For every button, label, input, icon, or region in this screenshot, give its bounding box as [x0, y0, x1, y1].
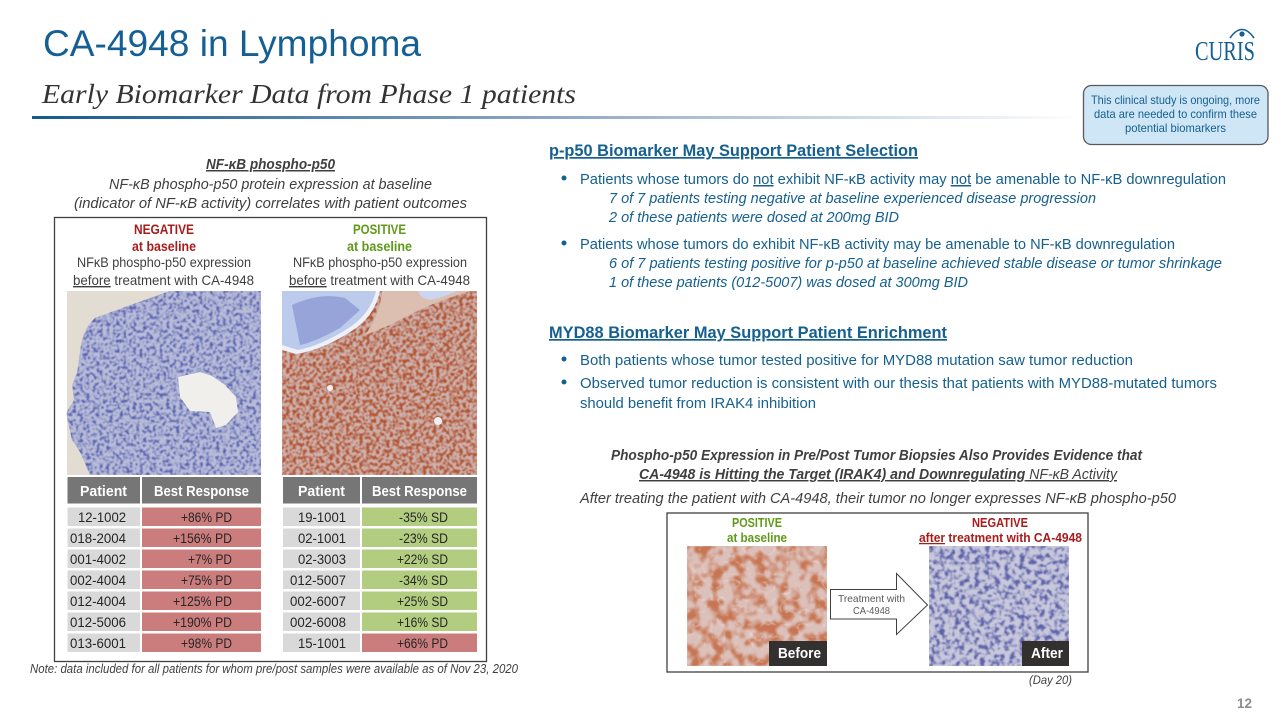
table: negative patients: 018-2004	[70, 530, 126, 546]
section: p-p50 biomarker: Patients whose tumors do not exhibit NF-κB activity may not be amenable to NF-κB downregulation	[580, 171, 1226, 188]
section: MYD88 biomarker: should benefit from IRAK4 inhibition	[580, 395, 816, 412]
table: negative patients: 12-1002	[78, 509, 126, 525]
label: positive at baseline: at baseline	[727, 531, 787, 545]
table: negative patients: 013-6001	[70, 635, 126, 651]
negative column heading: NFκB phospho-p50 expression	[77, 254, 251, 270]
panel: before and after treatment	[667, 513, 1088, 672]
arrow: treatment with CA-4948	[830, 574, 928, 634]
logo: Curis: CURIS	[1195, 36, 1255, 66]
section: p-p50 biomarker: 2 of these patients were dosed at 200mg BID	[608, 209, 899, 226]
left heading: NF-κB phospho-p50: (indicator of NF-κB activity) correlates with patient outcomes	[74, 195, 467, 212]
table: negative patients: +98% PD	[181, 635, 232, 651]
positive column heading	[289, 221, 470, 288]
table: positive patients: 02-3003	[298, 551, 346, 567]
left heading: NF-κB phospho-p50: NF-κB phospho-p50	[206, 156, 336, 173]
section: MYD88 biomarker: Observed tumor reduction is consistent with our thesis that patients with MYD88-mutated tumors	[580, 375, 1217, 392]
negative column heading: before treatment with CA-4948	[73, 272, 254, 288]
table: negative patients: Patient	[80, 483, 127, 500]
micrograph: after treatment	[929, 546, 1069, 666]
logo: Curis	[1195, 30, 1255, 66]
section: pre/post biopsy heading: After treating the patient with CA-4948, their tumor no longer expresses NF-κB phospho-p50	[579, 490, 1177, 507]
subtitle: Early Biomarker Data from Phase 1 patients	[41, 79, 576, 109]
left heading: NF-κB phospho-p50: NF-κB phospho-p50 protein expression at baseline	[109, 176, 432, 193]
page number: 12	[1237, 695, 1252, 711]
arrow: treatment with CA-4948: CA-4948	[853, 605, 890, 617]
negative column heading: NEGATIVE	[134, 221, 194, 237]
table: negative patients: 012-5006	[70, 614, 126, 630]
table: positive patients: 002-6008	[290, 614, 346, 630]
table: negative patients: +75% PD	[181, 572, 232, 588]
label: positive at baseline	[727, 516, 787, 545]
section: MYD88 biomarker: Both patients whose tumor tested positive for MYD88 mutation saw tumor reduction	[580, 352, 1133, 369]
label: negative after treatment	[919, 516, 1082, 545]
note: day 20: (Day 20)	[1029, 675, 1072, 687]
table: positive patients: +22% SD	[397, 551, 448, 567]
table: positive patients: Patient	[298, 483, 345, 500]
left heading: NF-κB phospho-p50	[74, 156, 467, 212]
section: pre/post biopsy heading	[579, 448, 1177, 507]
table: positive patients: +16% SD	[397, 614, 448, 630]
callout: study ongoing: potential biomarkers	[1125, 121, 1226, 135]
section: p-p50 biomarker: p-p50 Biomarker May Support Patient Selection	[549, 141, 918, 160]
table: negative patients: 001-4002	[70, 551, 126, 567]
callout: study ongoing	[1084, 86, 1268, 144]
table: positive patients: 012-5007	[290, 572, 346, 588]
table: positive patients: +66% PD	[397, 635, 448, 651]
positive column heading: at baseline	[347, 238, 412, 254]
table: negative patients: +7% PD	[188, 551, 232, 567]
section: p-p50 biomarker: 7 of 7 patients testing negative at baseline experienced disease progression	[609, 190, 1096, 207]
table: positive patients: -23% SD	[399, 530, 448, 546]
title: CA-4948 in Lymphoma	[43, 23, 421, 64]
table: negative patients	[68, 477, 261, 652]
section: MYD88 biomarker	[549, 323, 1217, 412]
section: pre/post biopsy heading: CA-4948 is Hitting the Target (IRAK4) and Downregulating NF-κB Activity	[639, 467, 1118, 483]
section: MYD88 biomarker: MYD88 Biomarker May Support Patient Enrichment	[549, 323, 947, 342]
section: p-p50 biomarker: 6 of 7 patients testing positive for p-p50 at baseline achieved stable disease or tumor shrinkage	[609, 255, 1222, 272]
micrograph: before treatment	[687, 546, 827, 666]
negative column heading: at baseline	[132, 238, 196, 254]
table: positive patients: +25% SD	[397, 593, 448, 609]
table: positive patients: -34% SD	[399, 572, 448, 588]
table: negative patients: +190% PD	[173, 614, 232, 630]
table: positive patients: 19-1001	[298, 509, 346, 525]
table: positive patients: -35% SD	[399, 509, 448, 525]
negative column heading	[73, 221, 254, 288]
panel: biopsy results by baseline status	[54, 218, 486, 662]
section: p-p50 biomarker	[549, 141, 1226, 291]
callout: study ongoing: This clinical study is ongoing, more	[1091, 93, 1260, 107]
micrograph: after treatment: After	[1031, 645, 1063, 662]
positive column heading: before treatment with CA-4948	[289, 272, 470, 288]
table: negative patients: Best Response	[154, 483, 249, 500]
positive column heading: NFκB phospho-p50 expression	[293, 254, 467, 270]
micrograph: negative baseline	[66, 291, 261, 475]
table: negative patients: +156% PD	[173, 530, 232, 546]
table: negative patients: +86% PD	[181, 509, 232, 525]
table: negative patients: 012-4004	[70, 593, 126, 609]
footnote: Note: data included for all patients for whom pre/post samples were available as of Nov 23, 2020	[30, 662, 518, 676]
label: positive at baseline: POSITIVE	[732, 516, 782, 530]
table: positive patients	[283, 477, 477, 652]
table: negative patients: 002-4004	[70, 572, 126, 588]
table: positive patients: Best Response	[372, 483, 467, 500]
label: negative after treatment: NEGATIVE	[972, 516, 1028, 530]
section: p-p50 biomarker: Patients whose tumors do exhibit NF-κB activity may be amenable to NF-κB downregulation	[580, 236, 1175, 253]
section: pre/post biopsy heading: Phospho-p50 Expression in Pre/Post Tumor Biopsies Also Provides Evidence that	[611, 448, 1143, 464]
table: positive patients: 002-6007	[290, 593, 346, 609]
arrow: treatment with CA-4948: Treatment with	[838, 593, 905, 605]
table: positive patients: 02-1001	[298, 530, 346, 546]
micrograph: positive baseline	[282, 291, 477, 475]
micrograph: before treatment: Before	[778, 645, 821, 662]
section: p-p50 biomarker: 1 of these patients (012-5007) was dosed at 300mg BID	[609, 274, 968, 291]
label: negative after treatment: after treatment with CA-4948	[919, 531, 1082, 545]
positive column heading: POSITIVE	[353, 221, 406, 237]
callout: study ongoing: data are needed to confirm these	[1094, 107, 1257, 121]
table: positive patients: 15-1001	[298, 635, 346, 651]
table: negative patients: +125% PD	[173, 593, 232, 609]
